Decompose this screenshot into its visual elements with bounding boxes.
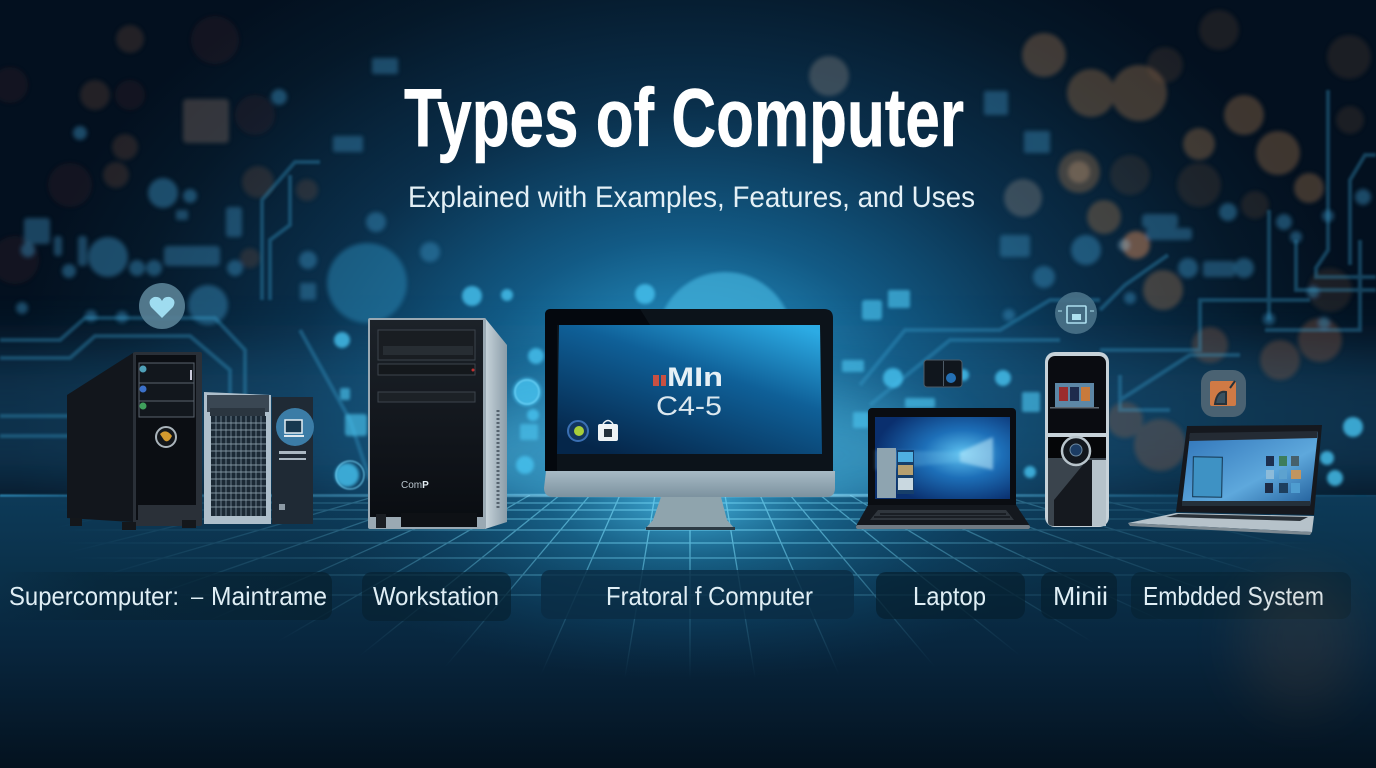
label panel: embedded system: Embdded System <box>1143 581 1324 611</box>
lower right warm glow <box>1240 570 1360 710</box>
label panel: workstation <box>362 572 511 621</box>
icon: floppy badge <box>1055 292 1097 334</box>
label panel: personal computer: Fratoral f Computer <box>606 581 813 611</box>
background bokeh lights <box>0 10 1371 471</box>
label panel: mini: Minii <box>1053 581 1108 611</box>
title: Types of Computer <box>404 71 964 164</box>
label panel: mini <box>1041 572 1117 619</box>
label panel: supercomputer and mainframe <box>0 572 332 620</box>
screen text <box>653 362 723 421</box>
label panel: supercomputer and mainframe: – <box>191 584 204 609</box>
label panel: workstation: Workstation <box>373 581 499 611</box>
floor <box>0 494 1376 768</box>
icon: dark tablet <box>924 360 962 387</box>
icon: heart badge <box>139 283 185 329</box>
tower logo: ComP <box>401 480 429 491</box>
label panel: supercomputer and mainframe: Supercomputer: <box>9 581 179 611</box>
device: workstation tower <box>368 318 507 529</box>
glowing nodes <box>334 284 1363 489</box>
label panel: laptop: Laptop <box>913 581 986 611</box>
screen text: MIn <box>667 362 723 392</box>
icon: app badge <box>568 421 588 441</box>
device: supercomputer tower <box>67 352 202 530</box>
label panel: embedded system <box>1131 572 1351 619</box>
circuit traces <box>0 90 1376 480</box>
icon: monitor badge <box>276 408 314 446</box>
label panel: supercomputer and mainframe: Maintrame <box>211 581 327 611</box>
device: laptop <box>856 408 1030 529</box>
side band glow <box>0 350 1376 490</box>
icon: orange app badge <box>1201 370 1246 417</box>
label panel: personal computer <box>541 570 854 619</box>
subtitle: Explained with Examples, Features, and Uses <box>408 181 975 214</box>
device: central monitor <box>544 309 835 530</box>
device: mini computer <box>1045 352 1109 527</box>
device: mainframe server <box>204 392 313 524</box>
large glow behind monitor <box>327 243 950 525</box>
device: embedded system laptop <box>1128 425 1322 535</box>
screen text: C4-5 <box>656 391 722 421</box>
icon: store bag <box>598 420 618 441</box>
label panel: laptop <box>876 572 1025 619</box>
